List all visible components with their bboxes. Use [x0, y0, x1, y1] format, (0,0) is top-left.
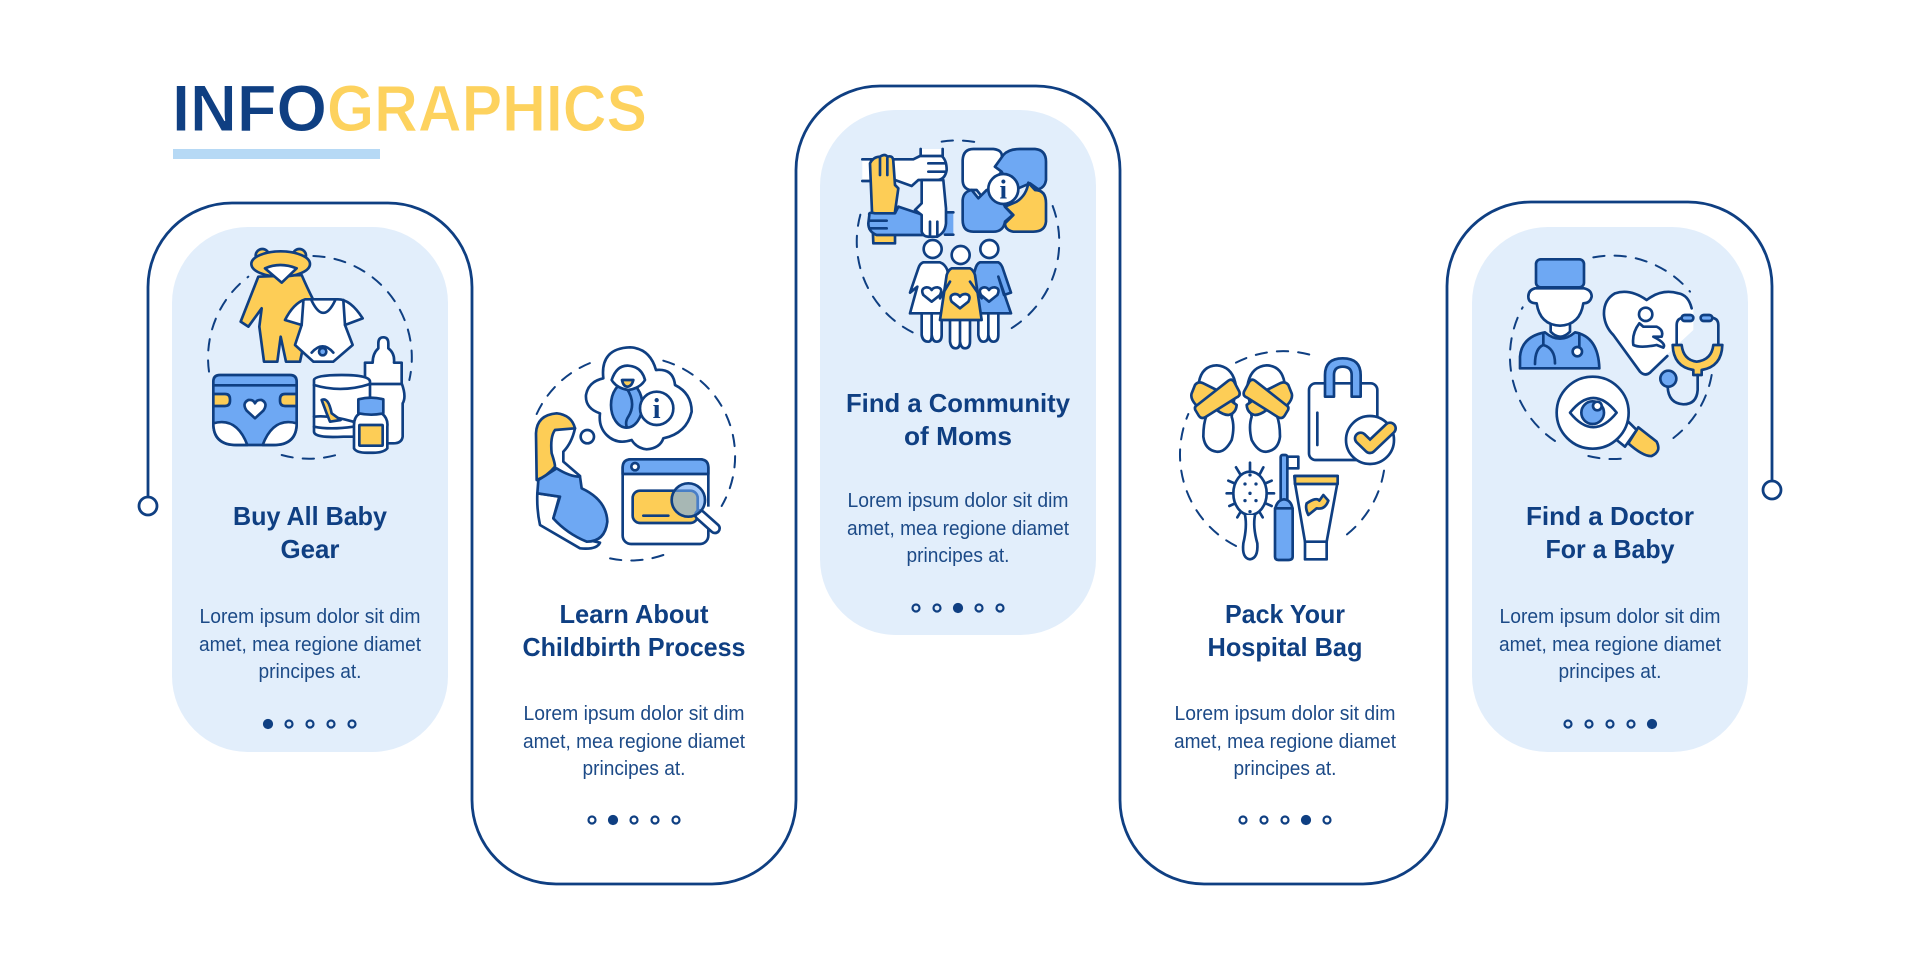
title: INFO — [172, 71, 327, 145]
pagination dots panel 2 — [588, 816, 680, 824]
text: buy all baby gear: principes at. — [258, 661, 362, 683]
title — [172, 71, 647, 145]
connector outline — [139, 86, 1781, 884]
text: learn about childbirth process — [522, 599, 746, 780]
text: find a community of moms: of Moms — [904, 421, 1012, 451]
icon: baby gear — [208, 249, 412, 459]
text: find a doctor for a baby: Lorem ipsum dolor sit dim — [1500, 606, 1720, 628]
text: find a community of moms: principes at. — [906, 545, 1010, 567]
pagination dots panel 3 — [912, 604, 1004, 612]
text: find a doctor for a baby: amet, mea regione diamet — [1499, 634, 1721, 656]
panel: find a doctor background — [1472, 227, 1748, 752]
text: pack your hospital bag: Lorem ipsum dolor sit dim — [1174, 703, 1396, 725]
title: GRAPHICS — [327, 71, 647, 145]
title underline — [173, 149, 380, 159]
icon: pregnant woman researching: i — [653, 393, 661, 425]
text: learn about childbirth process: Learn About — [560, 599, 709, 629]
text: buy all baby gear: Buy All Baby — [233, 501, 388, 531]
text: learn about childbirth process: Childbirth Process — [522, 632, 746, 662]
icon: doctor for a baby — [1510, 256, 1722, 459]
text: pack your hospital bag: principes at. — [1234, 758, 1336, 780]
text: learn about childbirth process: principes at. — [582, 758, 686, 780]
text: find a doctor for a baby: For a Baby — [1546, 534, 1675, 564]
pagination dots panel 4 — [1240, 816, 1330, 824]
text: pack your hospital bag: Hospital Bag — [1208, 632, 1362, 662]
text: pack your hospital bag — [1174, 599, 1396, 780]
text: pack your hospital bag: Pack Your — [1225, 599, 1345, 629]
text: buy all baby gear: Lorem ipsum dolor sit dim — [200, 606, 420, 628]
text: find a community of moms: amet, mea regione diamet — [847, 518, 1069, 540]
text: pack your hospital bag: amet, mea regione diamet — [1174, 731, 1396, 753]
panel: buy all baby gear background — [172, 227, 448, 752]
icon: hospital bag — [1180, 351, 1394, 560]
text: learn about childbirth process: amet, mea regione diamet — [523, 731, 745, 753]
text: buy all baby gear: Gear — [280, 534, 340, 564]
text: find a community of moms: Lorem ipsum dolor sit dim — [848, 490, 1068, 512]
text: find a doctor for a baby: principes at. — [1558, 661, 1662, 683]
text: buy all baby gear — [199, 501, 421, 683]
text: find a doctor for a baby — [1499, 501, 1721, 683]
icon: community of moms — [857, 140, 1059, 348]
text: buy all baby gear: amet, mea regione diamet — [199, 634, 421, 656]
icon: pregnant woman researching — [536, 347, 735, 561]
icon: community of moms: i — [1000, 174, 1008, 204]
pagination dots panel 5 — [1564, 720, 1656, 728]
pagination dots panel 1 — [264, 720, 356, 728]
panel: find a community background — [820, 110, 1096, 635]
text: learn about childbirth process: Lorem ipsum dolor sit dim — [524, 703, 744, 725]
text: find a community of moms: Find a Community — [846, 388, 1071, 418]
text: find a doctor for a baby: Find a Doctor — [1526, 501, 1694, 531]
text: find a community of moms — [846, 388, 1071, 567]
